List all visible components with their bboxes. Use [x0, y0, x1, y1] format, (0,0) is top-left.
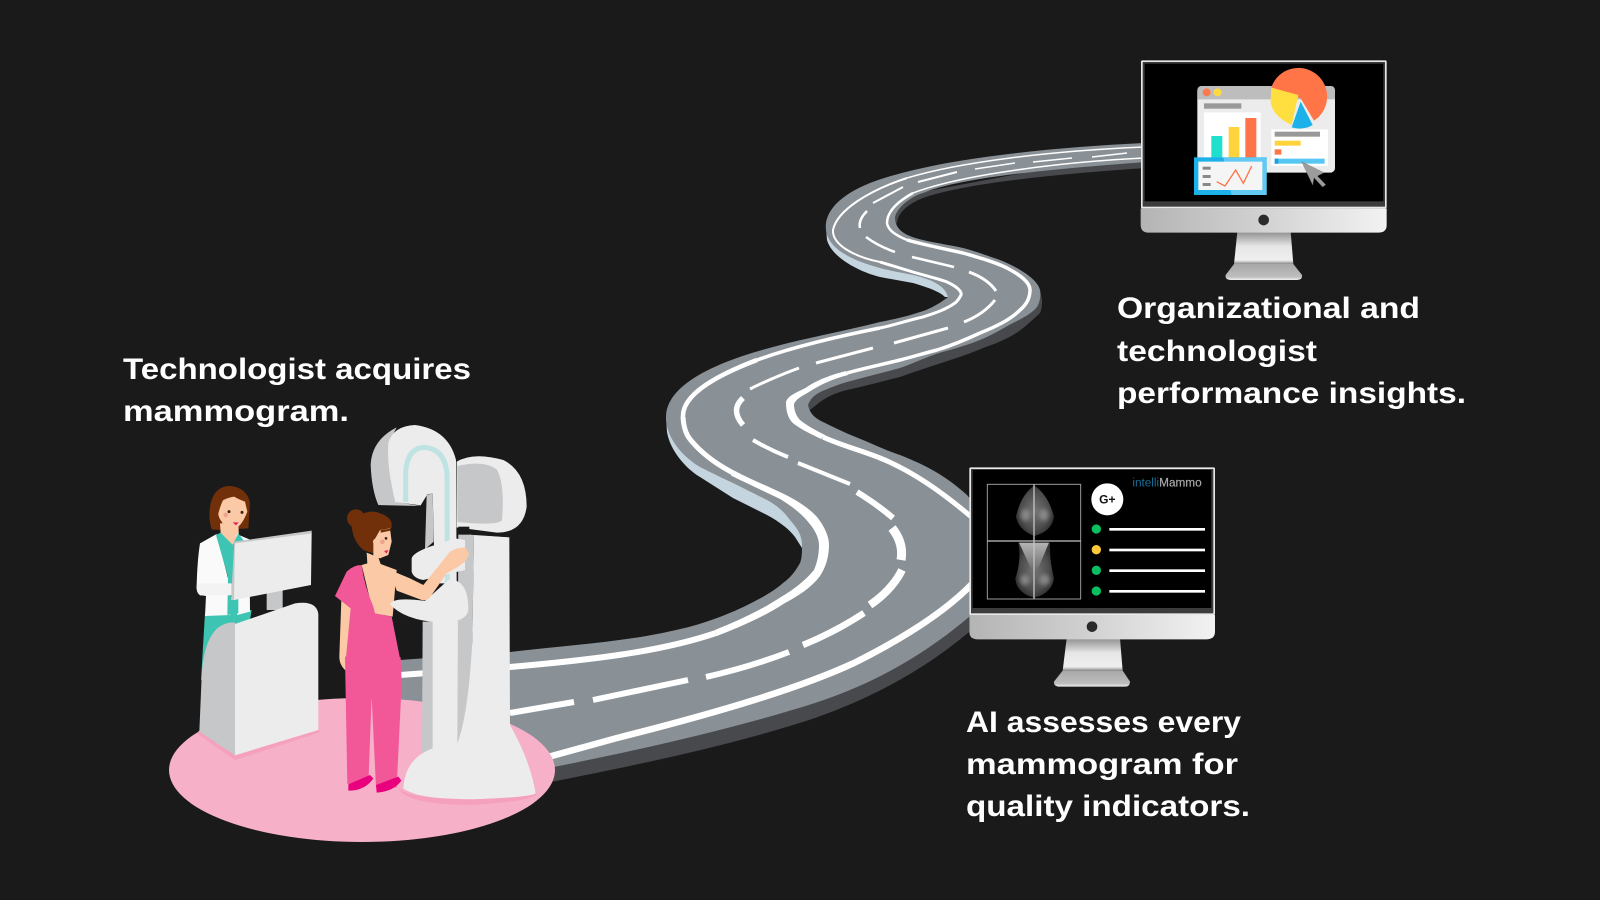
winding road [400, 143, 1145, 800]
lower paddle [390, 580, 468, 623]
road surface [400, 143, 1145, 800]
caption: insights: Organizational and [1117, 292, 1420, 325]
caption: AI assessment: AI assesses every [966, 706, 1241, 739]
dashboard window [1197, 86, 1335, 173]
road side walls [530, 150, 1145, 786]
grade badge: G+ [1099, 493, 1115, 507]
quality indicator rows [1092, 524, 1205, 596]
caption: AI assessment: mammogram for [966, 748, 1238, 781]
caption: technologist: mammogram. [123, 395, 349, 428]
caption: technologist [123, 353, 471, 428]
gantry head [371, 427, 420, 506]
line chart card [1194, 157, 1267, 195]
caption: insights: performance insights. [1117, 377, 1466, 410]
caption: AI assessment [966, 706, 1250, 823]
grade badge [1091, 483, 1123, 515]
caption: technologist: Technologist acquires [123, 353, 471, 386]
technologist and patient scene [197, 425, 538, 805]
road centre dashes [510, 153, 1127, 713]
patient figure [335, 509, 402, 793]
pink floor ellipse [169, 698, 555, 842]
monitor casing [1141, 60, 1387, 280]
control console [197, 531, 320, 760]
caption: insights [1117, 292, 1466, 410]
mammography machine column [371, 425, 538, 805]
caption: AI assessment: quality indicators. [966, 790, 1250, 823]
monitor casing [969, 467, 1215, 687]
pie chart [1271, 68, 1327, 129]
caption: insights: technologist [1117, 335, 1317, 368]
monitor: performance insights [1141, 60, 1387, 280]
list panel [1271, 129, 1328, 166]
intelliMammo logo: intelliMammo [1132, 475, 1202, 489]
cursor arrow [1302, 162, 1326, 187]
monitor: AI assessment [969, 467, 1215, 687]
bar chart [1211, 118, 1256, 159]
upper paddle [412, 538, 465, 580]
technologist figure [197, 486, 252, 680]
patient arm and hand [390, 547, 469, 600]
mammogram views [987, 484, 1081, 599]
road edge lines [400, 147, 1145, 757]
detector head [457, 456, 527, 533]
